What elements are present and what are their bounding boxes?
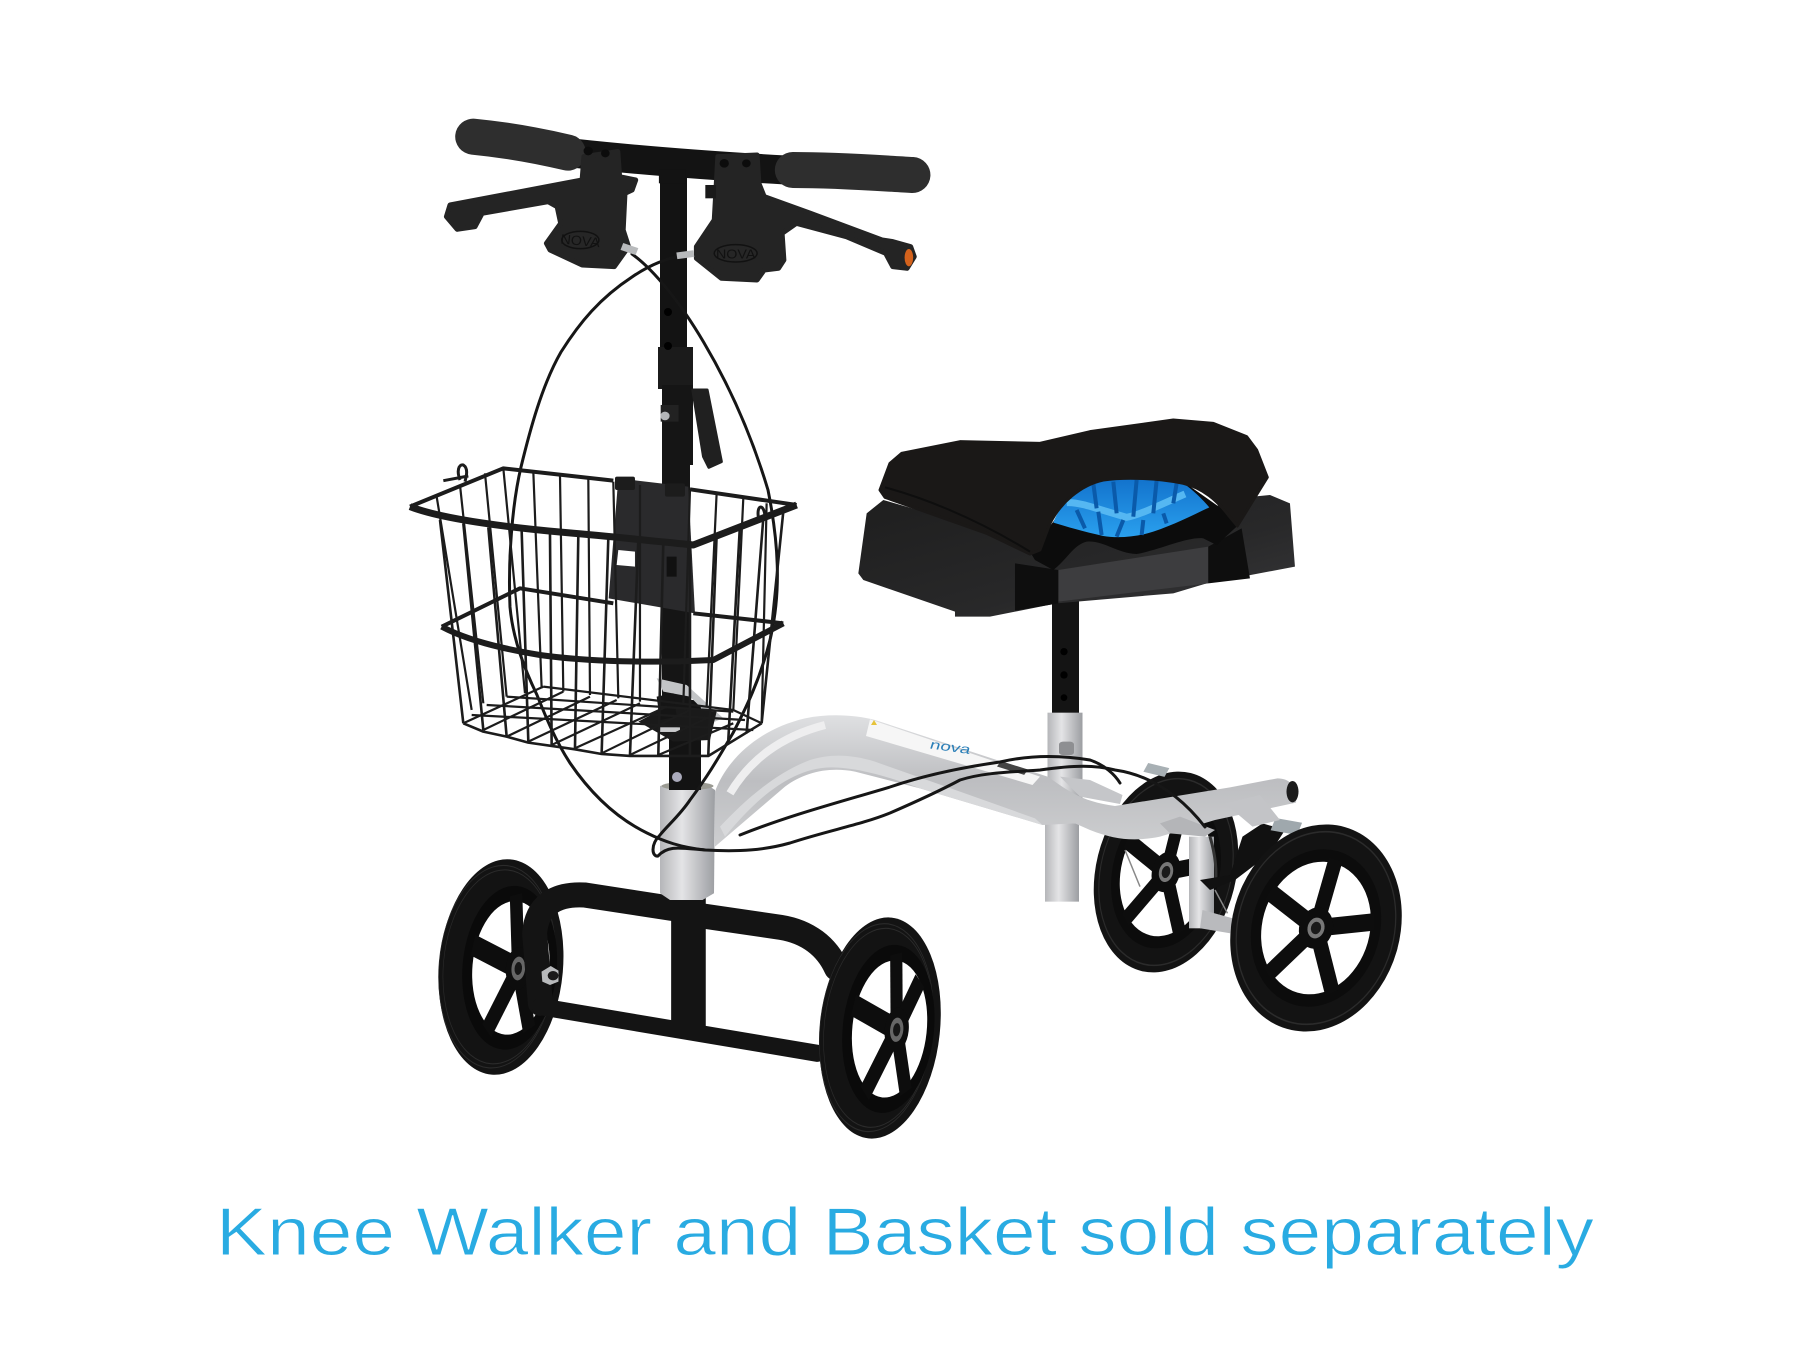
caption: Knee Walker and Basket sold separately (216, 1194, 1594, 1270)
wire basket (410, 465, 797, 756)
axle nut (542, 966, 558, 985)
basket top rim (410, 465, 797, 545)
rear far wheel (1073, 756, 1259, 988)
brake cables (509, 254, 1205, 856)
basket bottom grid (472, 692, 753, 755)
silver steering collar (660, 782, 715, 900)
basket back wires (437, 468, 767, 723)
silver seat post sleeve and lower peg (1045, 713, 1082, 902)
brake lever under basket (638, 678, 723, 742)
black cushion cover (880, 420, 1267, 554)
knee walker product illustration (410, 137, 1426, 1145)
handlebar and brake levers (446, 137, 914, 280)
cable ferrules (621, 243, 694, 259)
knee seat (858, 420, 1295, 701)
left brake lever (446, 147, 636, 267)
front wheel left (430, 854, 572, 1080)
left brake lever: NOVA (560, 231, 602, 250)
frame sticker: nova (928, 738, 973, 757)
right brake lever (696, 155, 914, 280)
right brake lever: NOVA (716, 246, 756, 262)
inner black cover lining (1030, 482, 1237, 570)
silver main frame tube (715, 715, 1298, 847)
front wheel right (809, 911, 951, 1145)
blue gel pad (1053, 478, 1209, 537)
rear fork and bracket (1125, 763, 1302, 933)
black steering stem (658, 170, 701, 790)
basket mounting plate (609, 477, 723, 742)
black seat post (1052, 600, 1079, 720)
right grip (793, 170, 912, 175)
seat post holes (1060, 648, 1068, 701)
basket front wires (440, 512, 783, 756)
stem adjustment lever (660, 390, 721, 467)
left grip (473, 137, 568, 153)
velcro straps (1015, 563, 1058, 611)
crossbar (575, 153, 786, 170)
frame lower flange (720, 756, 1042, 837)
plastic seat base (858, 495, 1295, 617)
front black U-shaped axle bar (535, 890, 837, 1053)
frame sticker (866, 719, 1040, 785)
basket middle rim (442, 588, 783, 662)
rear near wheel (1206, 804, 1426, 1052)
